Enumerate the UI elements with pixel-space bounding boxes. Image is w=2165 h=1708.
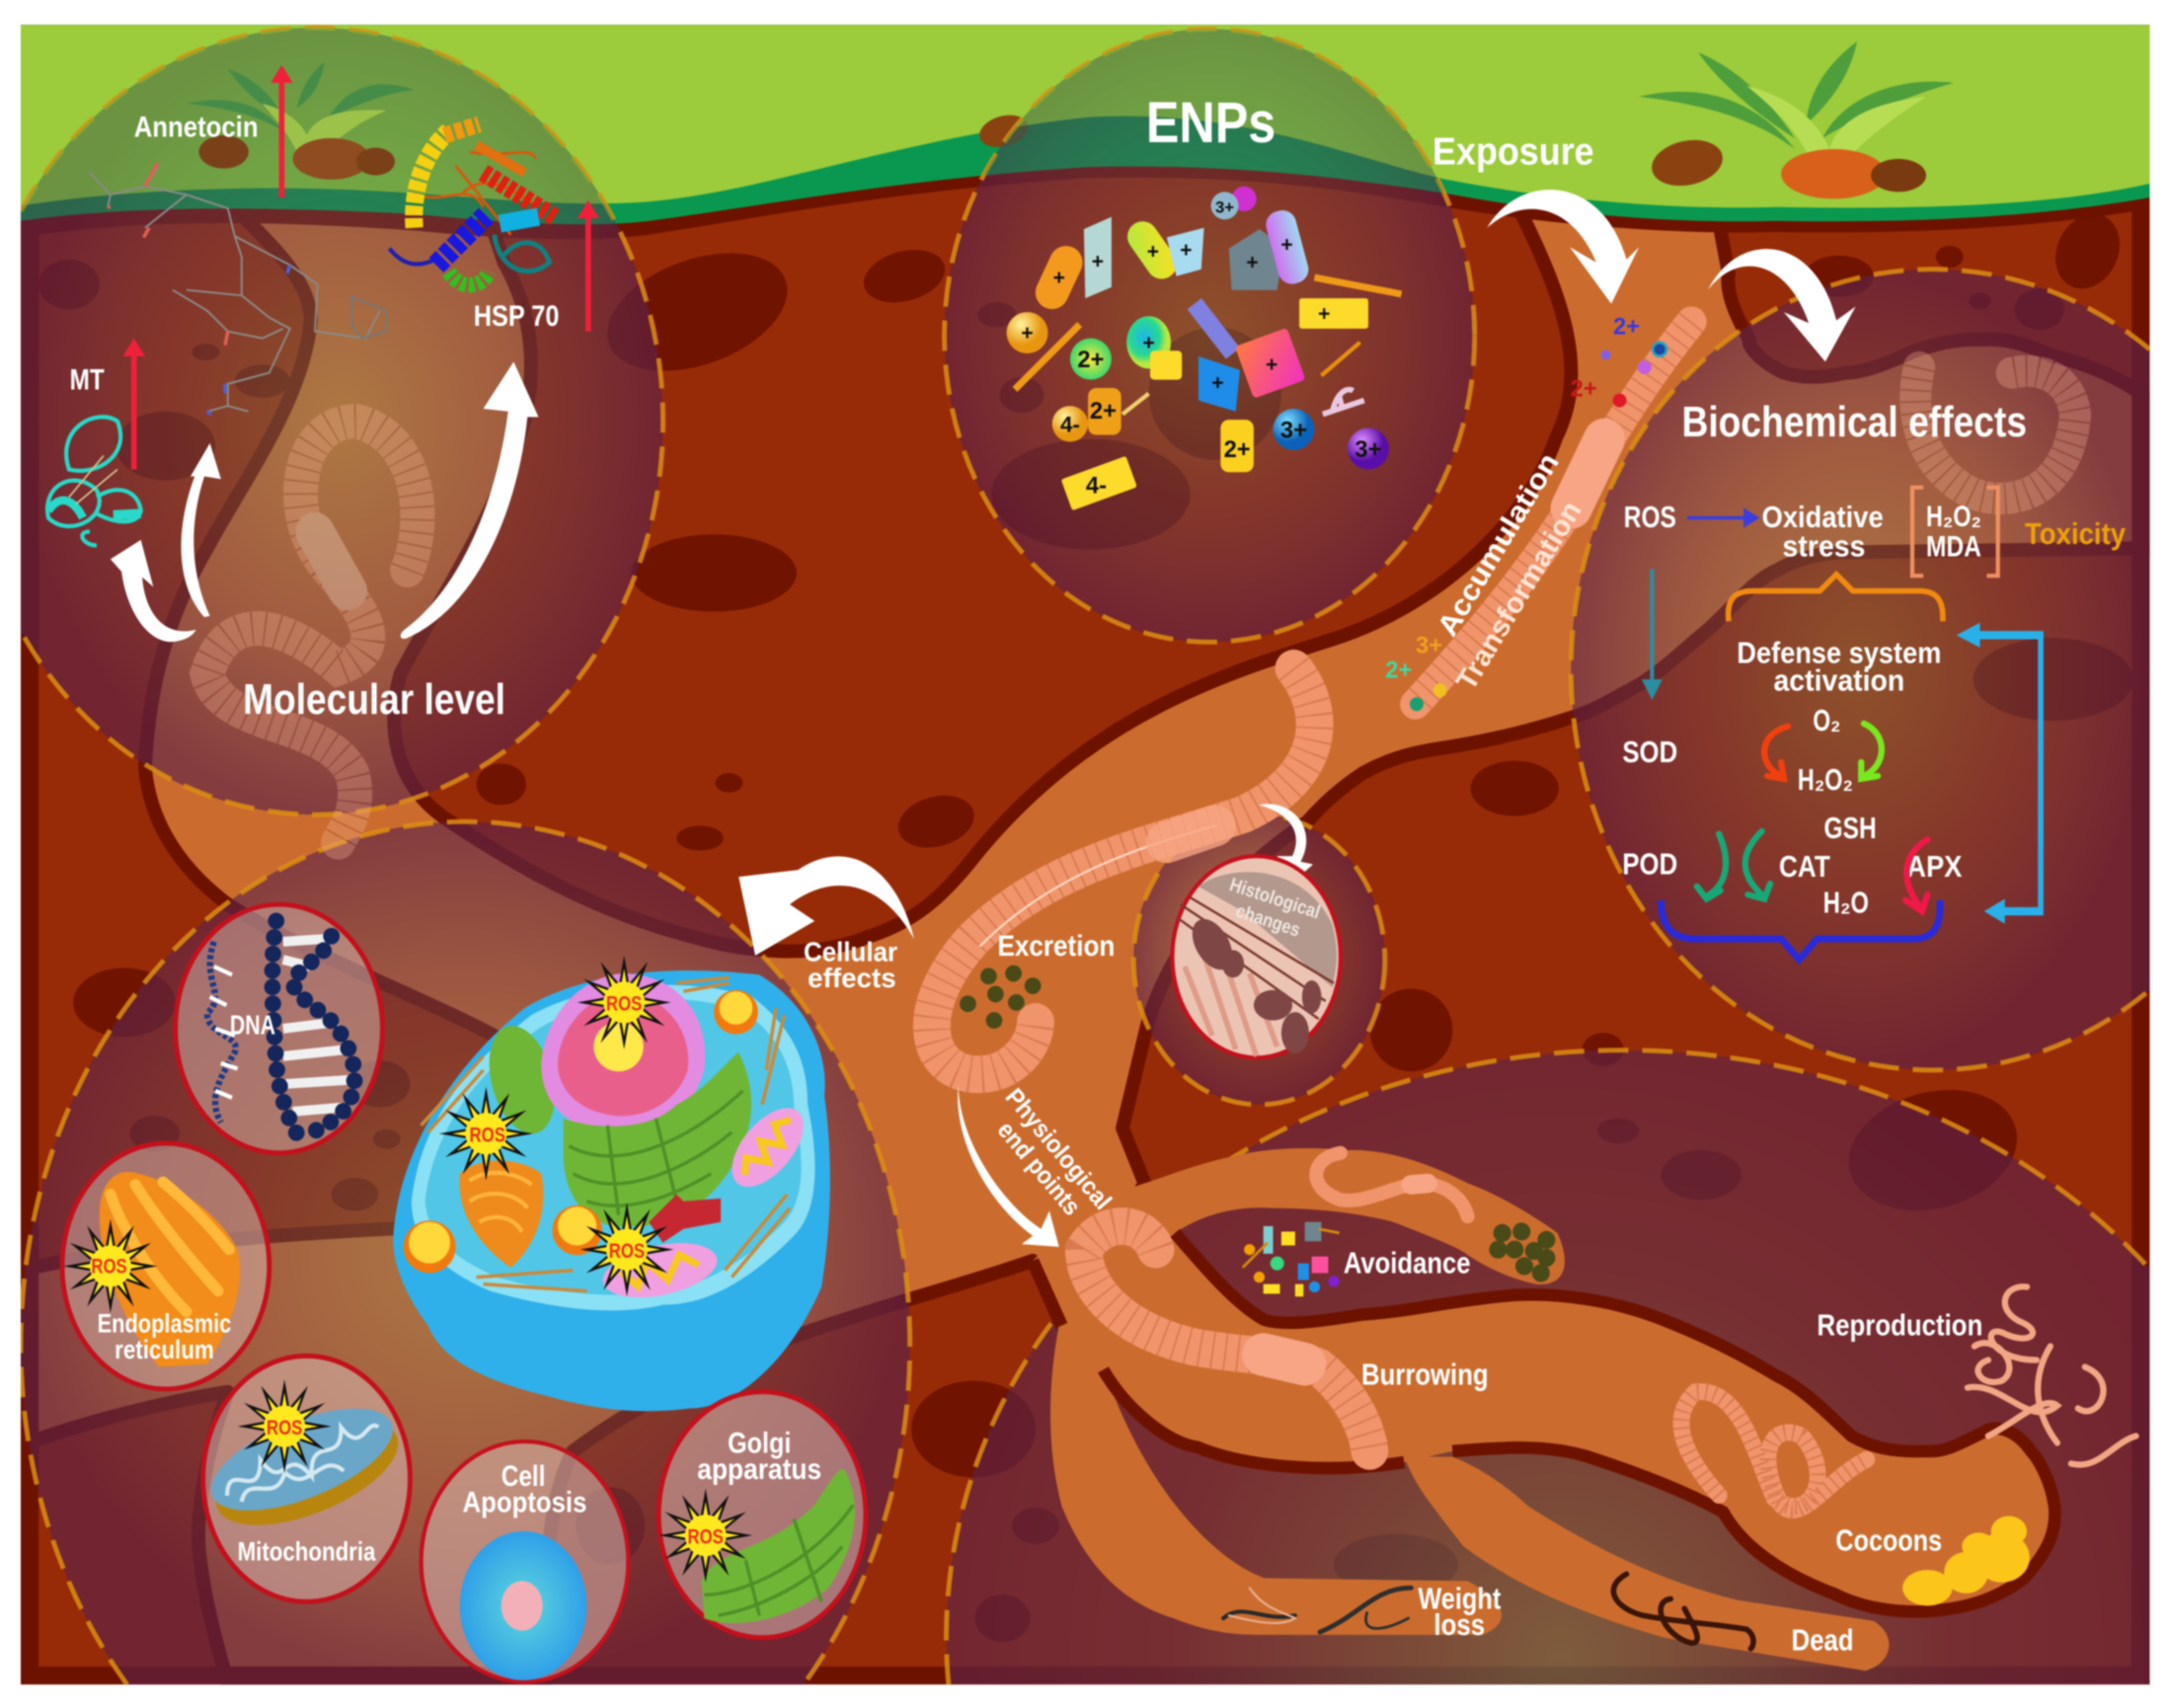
label: Excretion: Excretion bbox=[997, 930, 1115, 963]
brace: defense bbox=[1729, 575, 1943, 621]
burrow branch: weight loss bbox=[1050, 1312, 1502, 1635]
particle charge labels: + bbox=[1266, 353, 1277, 376]
particle: yellow capsule bbox=[1121, 215, 1183, 285]
label: Weight loss bbox=[1418, 1581, 1501, 1642]
label: Reproduction: Reproduction bbox=[1817, 1307, 1982, 1342]
icon: small DNA helix bbox=[207, 942, 238, 1123]
arrow: physiological bbox=[958, 1085, 1059, 1247]
label: Accumulation: Accumulation bbox=[1431, 447, 1566, 642]
panel: histological zone bbox=[1133, 815, 1385, 1105]
particle charge labels: 3+ bbox=[1215, 197, 1234, 216]
icon: large DNA helix bbox=[272, 921, 354, 1136]
label: Golgi apparatus: Golgi bbox=[728, 1427, 791, 1459]
ROS labels: ROS bbox=[606, 993, 642, 1016]
particle: teal cuboid bbox=[1084, 217, 1112, 298]
vesicles bbox=[403, 990, 758, 1273]
label: Cellular effects: effects bbox=[808, 963, 896, 993]
label: HSP 70: HSP 70 bbox=[474, 300, 559, 333]
particle: blue cube bbox=[1198, 356, 1240, 412]
title: ENPs: ENPs bbox=[1146, 91, 1276, 155]
particle charge labels: + bbox=[1180, 239, 1193, 262]
icon: avoidance pellets bbox=[1489, 1222, 1556, 1282]
label: Avoidance: Avoidance bbox=[1344, 1245, 1470, 1280]
label: Mitochondria: Mitochondria bbox=[238, 1536, 376, 1566]
enzyme labels: H₂O₂ bbox=[1798, 762, 1853, 797]
arrow: MT up bbox=[123, 339, 145, 470]
burrow network in physiological zone bbox=[1033, 1148, 2054, 1670]
panel: ENPs particles bbox=[1007, 91, 1402, 510]
icon: reticulum bbox=[100, 1172, 240, 1367]
icon: mitochondrion bbox=[197, 1387, 413, 1547]
particle charge labels: + bbox=[1143, 332, 1155, 354]
particle: purple capsule bbox=[1263, 207, 1311, 287]
particle: pink cube bbox=[1235, 328, 1306, 399]
label: Physiological end points: end points bbox=[992, 1117, 1086, 1221]
particle charge labels: + bbox=[1246, 252, 1259, 274]
enzyme labels: GSH bbox=[1824, 811, 1877, 845]
worm: exposure worm bbox=[1416, 322, 1691, 704]
panel: animal cell bbox=[393, 956, 830, 1411]
curved enzyme arrows bbox=[1697, 724, 1927, 911]
enzyme labels: CAT bbox=[1779, 849, 1830, 884]
particle charge labels: 2+ bbox=[1077, 347, 1104, 373]
icon: HSP 70 protein bbox=[389, 124, 557, 285]
arrow: ROS to stress bbox=[1687, 510, 1756, 524]
particle: long stick bbox=[1015, 325, 1080, 389]
labels: physiological section bbox=[804, 930, 1982, 1657]
worm: biochemical translucent worm bbox=[1915, 367, 2075, 499]
arrow: feedback bbox=[1957, 623, 2044, 924]
label: Histological changes: changes bbox=[1233, 900, 1303, 942]
arrow: cellular bbox=[738, 856, 914, 956]
icon: left grass plant and rocks bbox=[187, 62, 415, 180]
ROS burst: golgi bbox=[439, 1087, 533, 1181]
label: Burrowing: Burrowing bbox=[1361, 1358, 1489, 1392]
cytoskeleton sticks bbox=[422, 977, 790, 1291]
particle: 2+ yellow cylinder bbox=[1220, 420, 1254, 472]
icon: right grass plant bbox=[1639, 41, 1953, 153]
vesicle highlights bbox=[409, 991, 752, 1264]
panel: biochemical effects bbox=[1622, 399, 2126, 960]
label: Cell Apoptosis: Cell bbox=[502, 1460, 545, 1493]
ROS burst: mitochondria bbox=[238, 1379, 332, 1473]
ion labels and dots in worm: 3+ bbox=[1416, 633, 1442, 660]
particle charge labels: + bbox=[1053, 267, 1065, 289]
panel: mitochondria circle bbox=[197, 1356, 413, 1601]
icon: golgi stacks bbox=[702, 1469, 855, 1623]
particle charge labels: 2+ bbox=[1224, 436, 1251, 463]
panel: DNA circle bbox=[176, 904, 382, 1153]
heading: Biochemical effects: Biochemical effects bbox=[1681, 399, 2027, 446]
arrow: to annetocin bbox=[181, 443, 221, 617]
cell body bbox=[393, 970, 830, 1411]
ROS labels: ROS bbox=[609, 1240, 645, 1263]
icon: young worms bbox=[1968, 1286, 2136, 1465]
particle charge labels: + bbox=[1092, 250, 1104, 272]
bracket: markers bbox=[1912, 488, 1998, 576]
label: Histological changes: Histological bbox=[1227, 874, 1323, 923]
worm: molecular level translucent worm bbox=[207, 422, 418, 842]
left green organelle bbox=[478, 1019, 566, 1141]
particle: 3+ ball bbox=[1211, 187, 1257, 219]
particle charge labels: 3+ bbox=[1280, 417, 1307, 443]
particle: cyan ball bbox=[1126, 316, 1171, 368]
burrow branch: dead bbox=[1404, 1456, 1889, 1670]
arrow: biochemical bbox=[1708, 249, 1856, 361]
label: Toxicity: Toxicity bbox=[2025, 516, 2126, 551]
cell rim bbox=[412, 985, 814, 1310]
enzyme labels: O₂ bbox=[1813, 703, 1840, 738]
label: Cell Apoptosis: Apoptosis bbox=[463, 1486, 586, 1518]
enzyme labels bbox=[1622, 703, 1963, 919]
icon: cocoons bbox=[1902, 1516, 2030, 1606]
particle: blue cube bbox=[1167, 228, 1204, 276]
particle: nanoflower bbox=[1323, 390, 1364, 415]
panel: golgi apparatus circle bbox=[658, 1392, 866, 1638]
label: Cellular effects: Cellular bbox=[804, 936, 897, 967]
particle: yellow bar bbox=[1299, 298, 1368, 329]
label: Cellular effects bbox=[804, 936, 897, 993]
particle: thin stick bbox=[1321, 343, 1360, 375]
particle charge labels: + bbox=[1211, 371, 1224, 394]
particle: orange capsule bbox=[1030, 241, 1088, 315]
icon: dead worms bbox=[1613, 1574, 1753, 1649]
arrow: HSP up bbox=[578, 200, 599, 332]
enzyme labels: POD bbox=[1622, 846, 1677, 881]
icon: weight loss worms bbox=[1223, 1588, 1411, 1632]
arrow: annetocin up bbox=[271, 65, 293, 197]
particle charge labels: 4- bbox=[1086, 472, 1107, 499]
label: H2O2 MDA bbox=[1926, 501, 1981, 564]
rough endoplasmic reticulum bbox=[564, 1052, 751, 1227]
label: ROS: ROS bbox=[688, 1526, 724, 1549]
icon: apoptotic cell bbox=[460, 1531, 586, 1680]
label: Endoplasmic reticulum: reticulum bbox=[115, 1335, 214, 1364]
ROS burst: nucleus bbox=[578, 956, 671, 1049]
panel: molecular level zone bbox=[21, 28, 663, 815]
panel: ENPs zone bbox=[945, 29, 1475, 642]
particle: orange stick bbox=[1314, 277, 1402, 294]
ROS burst: golgi apparatus bbox=[658, 1489, 752, 1583]
cytoplasm bbox=[425, 999, 801, 1295]
panel: physiological zone bbox=[947, 1050, 2150, 1684]
label: Oxidative stress bbox=[1762, 500, 1884, 564]
particle: grey cube bbox=[1229, 229, 1284, 290]
panel: endoplasmic reticulum circle bbox=[62, 1143, 270, 1389]
panel: biochemical zone bbox=[1571, 270, 2150, 1070]
label: MT: MT bbox=[70, 363, 105, 396]
icon: histological section bbox=[1172, 856, 1341, 1057]
label: Exposure: Exposure bbox=[1432, 130, 1594, 173]
arrow: histological bbox=[1260, 804, 1313, 884]
particle: violet rod bbox=[1195, 304, 1233, 353]
particle charge labels bbox=[1021, 197, 1382, 499]
enzyme labels: APX bbox=[1906, 849, 1963, 884]
ion labels and dots in worm: 2+ bbox=[1613, 313, 1640, 340]
panel: cellular zone bbox=[21, 821, 910, 1684]
particle: 2+ cylinder bbox=[1088, 388, 1121, 435]
enzyme labels: H₂O bbox=[1823, 885, 1869, 919]
label: DNA: DNA bbox=[230, 1010, 275, 1041]
label: Golgi apparatus bbox=[697, 1427, 821, 1486]
label: Oxidative stress: Oxidative bbox=[1762, 500, 1884, 534]
particle charge labels: + bbox=[1021, 322, 1034, 345]
icon: excretion pellets bbox=[960, 966, 1042, 1029]
label: Cocoons: Cocoons bbox=[1835, 1523, 1942, 1558]
label: Physiological end points: Physiological bbox=[1000, 1083, 1117, 1215]
label: Dead: Dead bbox=[1792, 1622, 1854, 1657]
label: Defense system activation bbox=[1737, 635, 1941, 697]
label: Annetocin: Annetocin bbox=[134, 111, 259, 143]
mitochondrion bottom bbox=[598, 1234, 722, 1306]
ROS labels bbox=[470, 993, 645, 1263]
arrow: ROS to SOD bbox=[1642, 569, 1662, 700]
label: Endoplasmic reticulum: Endoplasmic bbox=[98, 1309, 231, 1339]
heading: Molecular level: Molecular level bbox=[243, 676, 505, 724]
burrow dark edges bbox=[1033, 1233, 2054, 1611]
particle: 3+ blue ball bbox=[1273, 409, 1314, 450]
ion labels and dots in worm bbox=[1385, 313, 1666, 711]
label: H2O2 MDA: MDA bbox=[1926, 531, 1981, 564]
label: Weight loss: loss bbox=[1433, 1607, 1485, 1642]
particle: 4- bar bbox=[1061, 456, 1137, 510]
particle: 4- ball bbox=[1052, 406, 1088, 442]
golgi bbox=[459, 1161, 543, 1268]
icon: avoided nanoparticles bbox=[1243, 1222, 1340, 1296]
worm: reproducing worm bbox=[1681, 1392, 1867, 1511]
label: ROS: ROS bbox=[267, 1417, 302, 1439]
particle charge labels: + bbox=[1147, 241, 1159, 264]
brace: enzymes bbox=[1661, 900, 1940, 960]
icon: annetocin molecule bbox=[90, 163, 387, 415]
label: Cell Apoptosis bbox=[463, 1460, 586, 1518]
worm: avoidance worm bbox=[1316, 1153, 1468, 1216]
ROS burst: ER bbox=[63, 1219, 157, 1313]
particle: yellow cube bbox=[1150, 350, 1182, 380]
ROS burst: mitochondrion bbox=[580, 1203, 674, 1296]
label: Golgi apparatus: apparatus bbox=[697, 1453, 821, 1486]
arrow: to HSP 70 bbox=[401, 361, 538, 639]
dark soil line under grass bbox=[39, 166, 2132, 239]
grass seen through zones bbox=[20, 27, 1444, 225]
panel: cell apoptosis circle bbox=[422, 1441, 628, 1681]
label: ROS: ROS bbox=[1624, 500, 1676, 534]
label: Weight loss: Weight bbox=[1418, 1581, 1501, 1615]
particle: 3+ purple ball bbox=[1348, 428, 1389, 470]
arrow: exposure bbox=[1487, 190, 1639, 304]
label: H2O2 MDA: H₂O₂ bbox=[1926, 501, 1981, 533]
particle: orange ball bbox=[1007, 312, 1048, 353]
grass surface bbox=[21, 25, 2150, 207]
particle charge labels: 2+ bbox=[1090, 398, 1117, 425]
ROS labels: ROS bbox=[470, 1125, 505, 1147]
particle: 2+ ball bbox=[1070, 339, 1112, 380]
icon: rocks bbox=[975, 110, 1926, 198]
particle charge labels: 4- bbox=[1060, 413, 1080, 437]
particle charge labels: + bbox=[1318, 302, 1330, 325]
icon: MT protein bbox=[47, 417, 141, 545]
particle charge labels: 3+ bbox=[1354, 436, 1382, 463]
label: Endoplasmic reticulum bbox=[98, 1309, 231, 1364]
label: Transformation: Transformation bbox=[1450, 496, 1588, 696]
label: ROS: ROS bbox=[91, 1255, 127, 1278]
panel: molecular level bbox=[47, 65, 599, 724]
enzyme labels: SOD bbox=[1622, 735, 1677, 769]
label: Defense system activation: activation bbox=[1773, 662, 1904, 697]
label: Oxidative stress: stress bbox=[1783, 529, 1865, 564]
dark green grass band bbox=[21, 25, 2150, 224]
nucleus bbox=[541, 973, 705, 1135]
red organelle bbox=[649, 1195, 721, 1243]
worm: excretion worm bbox=[932, 668, 1315, 1074]
ion labels and dots in worm: 2+ bbox=[1385, 658, 1412, 684]
arrow: to MT bbox=[111, 540, 196, 642]
mitochondrion right bbox=[719, 1096, 816, 1200]
particle: small stick bbox=[1122, 394, 1149, 415]
particle charge labels: + bbox=[1280, 234, 1293, 257]
worm: burrowing worm bbox=[1084, 1226, 1369, 1451]
label: Defense system activation: Defense system bbox=[1737, 635, 1941, 669]
ion labels and dots in worm: 2+ bbox=[1571, 375, 1597, 402]
